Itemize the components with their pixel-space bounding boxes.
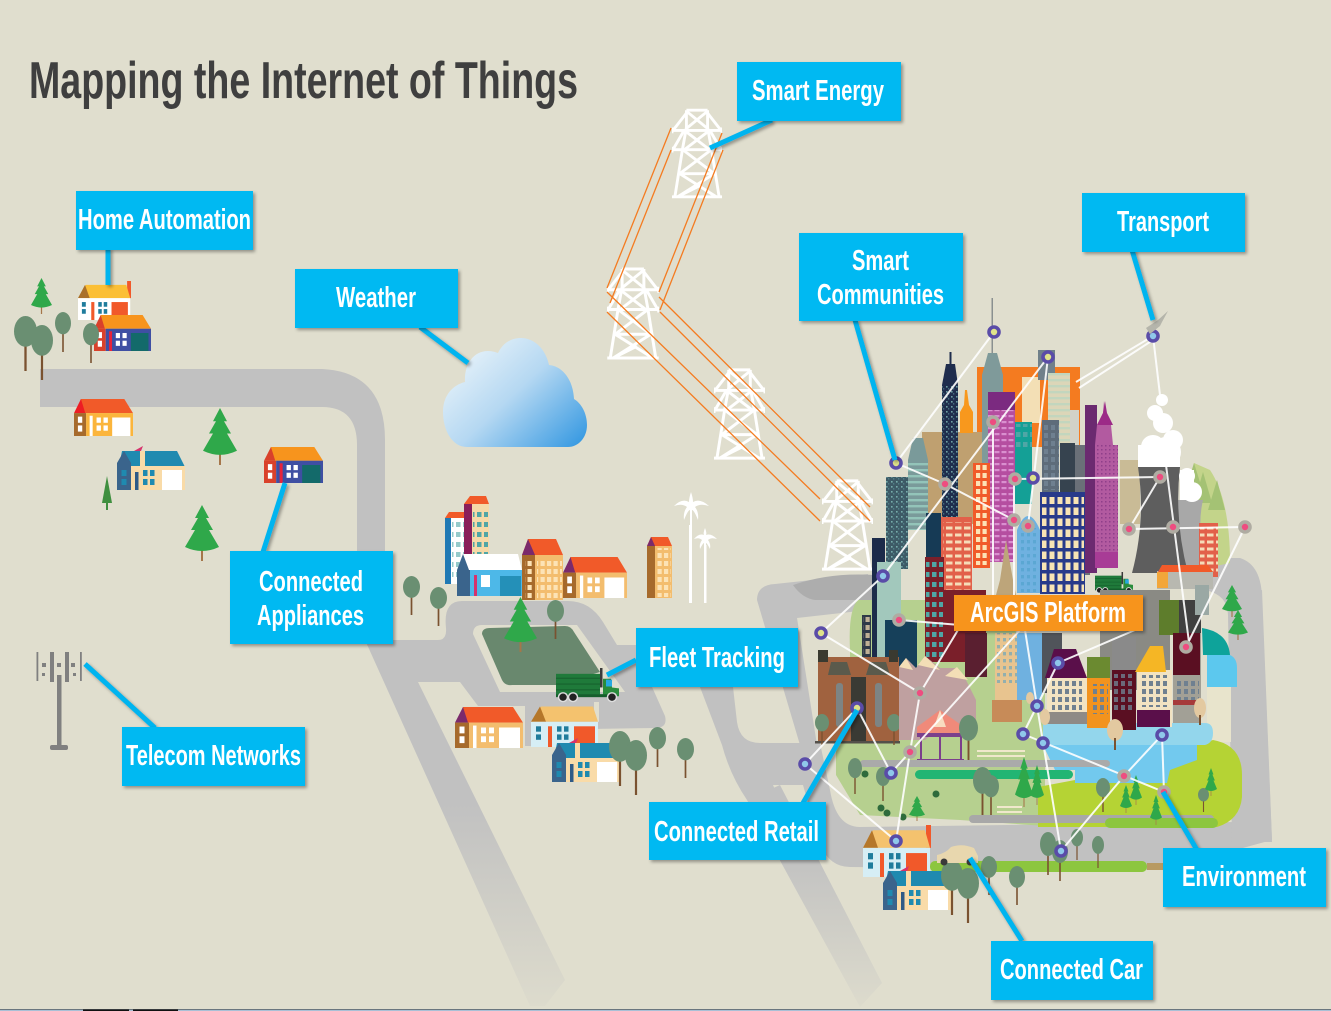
row: cream purple-roof house — [1045, 649, 1087, 724]
stadium — [793, 574, 875, 600]
pine — [203, 408, 237, 465]
city illustration — [815, 298, 1248, 872]
park paths — [860, 760, 1218, 872]
tree row — [609, 727, 694, 795]
purple tower — [988, 392, 1015, 562]
IoT network nodes — [800, 327, 1250, 856]
label: Connected Appliances — [230, 551, 393, 644]
brick church — [815, 650, 900, 744]
dark towers — [1060, 443, 1090, 575]
tree cluster — [14, 312, 71, 380]
label: Connected Retail — [649, 802, 826, 860]
tan building behind towers — [1120, 460, 1140, 524]
label: Home Automation — [76, 191, 253, 250]
label: Environment — [1163, 848, 1326, 907]
palm trees — [674, 492, 717, 603]
maroon block — [925, 557, 944, 662]
tree row — [941, 829, 1104, 923]
road: central block — [385, 601, 666, 746]
skinny pine — [102, 476, 112, 510]
cottage — [531, 702, 599, 747]
icon: telecom mast — [36, 652, 82, 750]
road: fleet connector to city — [700, 590, 1272, 870]
road: ring behind city — [757, 574, 868, 745]
pine — [504, 597, 537, 652]
road: right curve behind city — [1205, 558, 1272, 842]
park tree — [959, 715, 978, 761]
blue house — [117, 446, 185, 490]
pink tents — [899, 656, 976, 740]
label: Fleet Tracking — [636, 628, 798, 687]
label: Smart Communities: Communities — [817, 279, 944, 311]
label: Fleet Tracking: Fleet Tracking — [649, 642, 785, 674]
dark blue block — [926, 513, 941, 558]
power line towers — [607, 110, 873, 569]
cottage — [863, 825, 931, 877]
dark teal tower — [886, 477, 908, 569]
row: tall maroon-top building — [1173, 633, 1201, 723]
park pines — [909, 757, 1217, 825]
pine — [185, 505, 219, 561]
tall blue block — [445, 512, 465, 584]
icon: cloud — [443, 338, 587, 447]
tower 4 — [822, 481, 873, 569]
cottage — [78, 281, 131, 320]
car — [937, 845, 978, 866]
label: Weather — [295, 269, 458, 328]
orange house — [74, 399, 133, 436]
lawn island — [473, 625, 625, 692]
label: ArcGIS Platform — [954, 595, 1143, 631]
icon: airplane — [1146, 311, 1168, 334]
small orange tower — [960, 390, 973, 433]
tree front — [83, 323, 99, 363]
label: Home Automation: Home Automation — [78, 204, 251, 236]
right pines — [1222, 585, 1248, 640]
dark purple tower — [1085, 405, 1097, 573]
dark spiky block — [885, 620, 917, 670]
tent peaks — [899, 656, 968, 680]
river light band — [1043, 723, 1213, 745]
dark cooling tower — [1132, 467, 1188, 573]
pink tower — [1095, 401, 1118, 568]
road: upper-left curve — [40, 369, 385, 552]
small apartment — [647, 537, 672, 598]
callout leader lines — [85, 120, 1197, 941]
pale side tower — [1195, 585, 1209, 615]
light blue tower — [1017, 516, 1040, 593]
green hill with pines — [1184, 463, 1230, 572]
town centre buildings — [403, 492, 717, 795]
row: slate tower — [1042, 633, 1062, 693]
low orange roof building — [1157, 565, 1213, 589]
houses and trees: home area — [14, 278, 323, 561]
navy cylinder — [872, 538, 885, 668]
spire church — [996, 540, 1016, 595]
blue house — [883, 866, 951, 910]
label: Smart Communities: Smart — [852, 245, 909, 277]
cream strip by pond — [1207, 687, 1231, 742]
bottom edge strip — [0, 1009, 1331, 1011]
row: gold roof house — [1135, 646, 1172, 727]
lawn — [482, 626, 600, 685]
empire tower — [942, 352, 958, 517]
label: Telecom Networks: Telecom Networks — [126, 740, 301, 772]
label: Connected Appliances: Appliances — [257, 600, 364, 632]
orange window tower — [973, 463, 990, 568]
power wires — [607, 128, 870, 521]
title: Mapping the Internet of Things — [29, 52, 578, 110]
river deep — [1043, 745, 1197, 783]
label: Connected Car: Connected Car — [1000, 954, 1143, 986]
city truck — [1095, 572, 1133, 593]
steam — [1138, 394, 1202, 502]
tower 1 — [672, 110, 722, 197]
slate tower — [1042, 420, 1059, 492]
label: Smart Energy — [737, 62, 901, 121]
row: orange house — [1087, 657, 1110, 728]
teal dome and pond — [1202, 628, 1237, 687]
road network — [40, 369, 1272, 1007]
label: Connected Car — [991, 941, 1153, 1000]
salmon side block — [1199, 523, 1218, 577]
grey block behind row — [1100, 590, 1170, 690]
tall maroon block — [464, 496, 489, 556]
park ground — [836, 600, 1045, 826]
green roof block — [1159, 600, 1179, 635]
trees — [403, 576, 564, 639]
carousel — [917, 710, 964, 763]
label: Transport — [1082, 193, 1245, 252]
blue warehouse — [457, 554, 522, 596]
background orange block — [977, 367, 1080, 447]
tan mass — [922, 432, 982, 524]
spire tower — [982, 298, 1003, 470]
label: Connected Appliances: Connected — [259, 566, 363, 598]
navy house — [264, 447, 323, 483]
IoT network lines — [805, 332, 1245, 851]
label: Smart Energy: Smart Energy — [752, 75, 884, 107]
tower 3 — [714, 370, 765, 458]
blue house — [552, 738, 620, 782]
garage house — [563, 557, 627, 598]
teal tower — [1015, 422, 1032, 504]
small dark trees — [862, 770, 940, 820]
label: Connected Retail: Connected Retail — [654, 816, 819, 848]
road: long diagonal fading — [365, 640, 565, 1006]
tan stripe building — [992, 633, 1022, 722]
label: Weather: Weather — [336, 282, 416, 314]
salmon block — [941, 517, 972, 592]
label: ArcGIS Platform: ArcGIS Platform — [970, 597, 1126, 629]
pine — [31, 278, 52, 314]
maroon right block — [944, 590, 987, 677]
navy window tower — [1040, 492, 1085, 594]
tan tower — [1038, 350, 1079, 450]
yellow window tower — [862, 615, 871, 661]
bright green park — [1038, 740, 1242, 827]
label: Smart Communities — [799, 233, 963, 321]
road: second diagonal fading — [747, 785, 882, 1007]
truck — [556, 668, 619, 702]
pale tower — [877, 562, 901, 670]
label: Telecom Networks — [122, 727, 305, 786]
striped teal tower — [908, 438, 928, 530]
pale blue block — [1017, 633, 1042, 700]
grey cooling tower — [1170, 500, 1207, 567]
row: maroon house — [1112, 637, 1136, 730]
park trees — [848, 758, 1209, 815]
church trees — [815, 714, 901, 745]
lower houses near city — [863, 825, 1104, 923]
navy house — [94, 315, 151, 351]
cream block — [1022, 377, 1040, 423]
apartment block — [522, 539, 563, 600]
picket fences — [977, 750, 1025, 813]
label: Transport: Transport — [1117, 206, 1209, 238]
dark roof block — [1179, 600, 1201, 635]
blossom trees — [1026, 692, 1206, 750]
orange garage house — [455, 707, 523, 748]
tower 2 — [607, 269, 659, 358]
